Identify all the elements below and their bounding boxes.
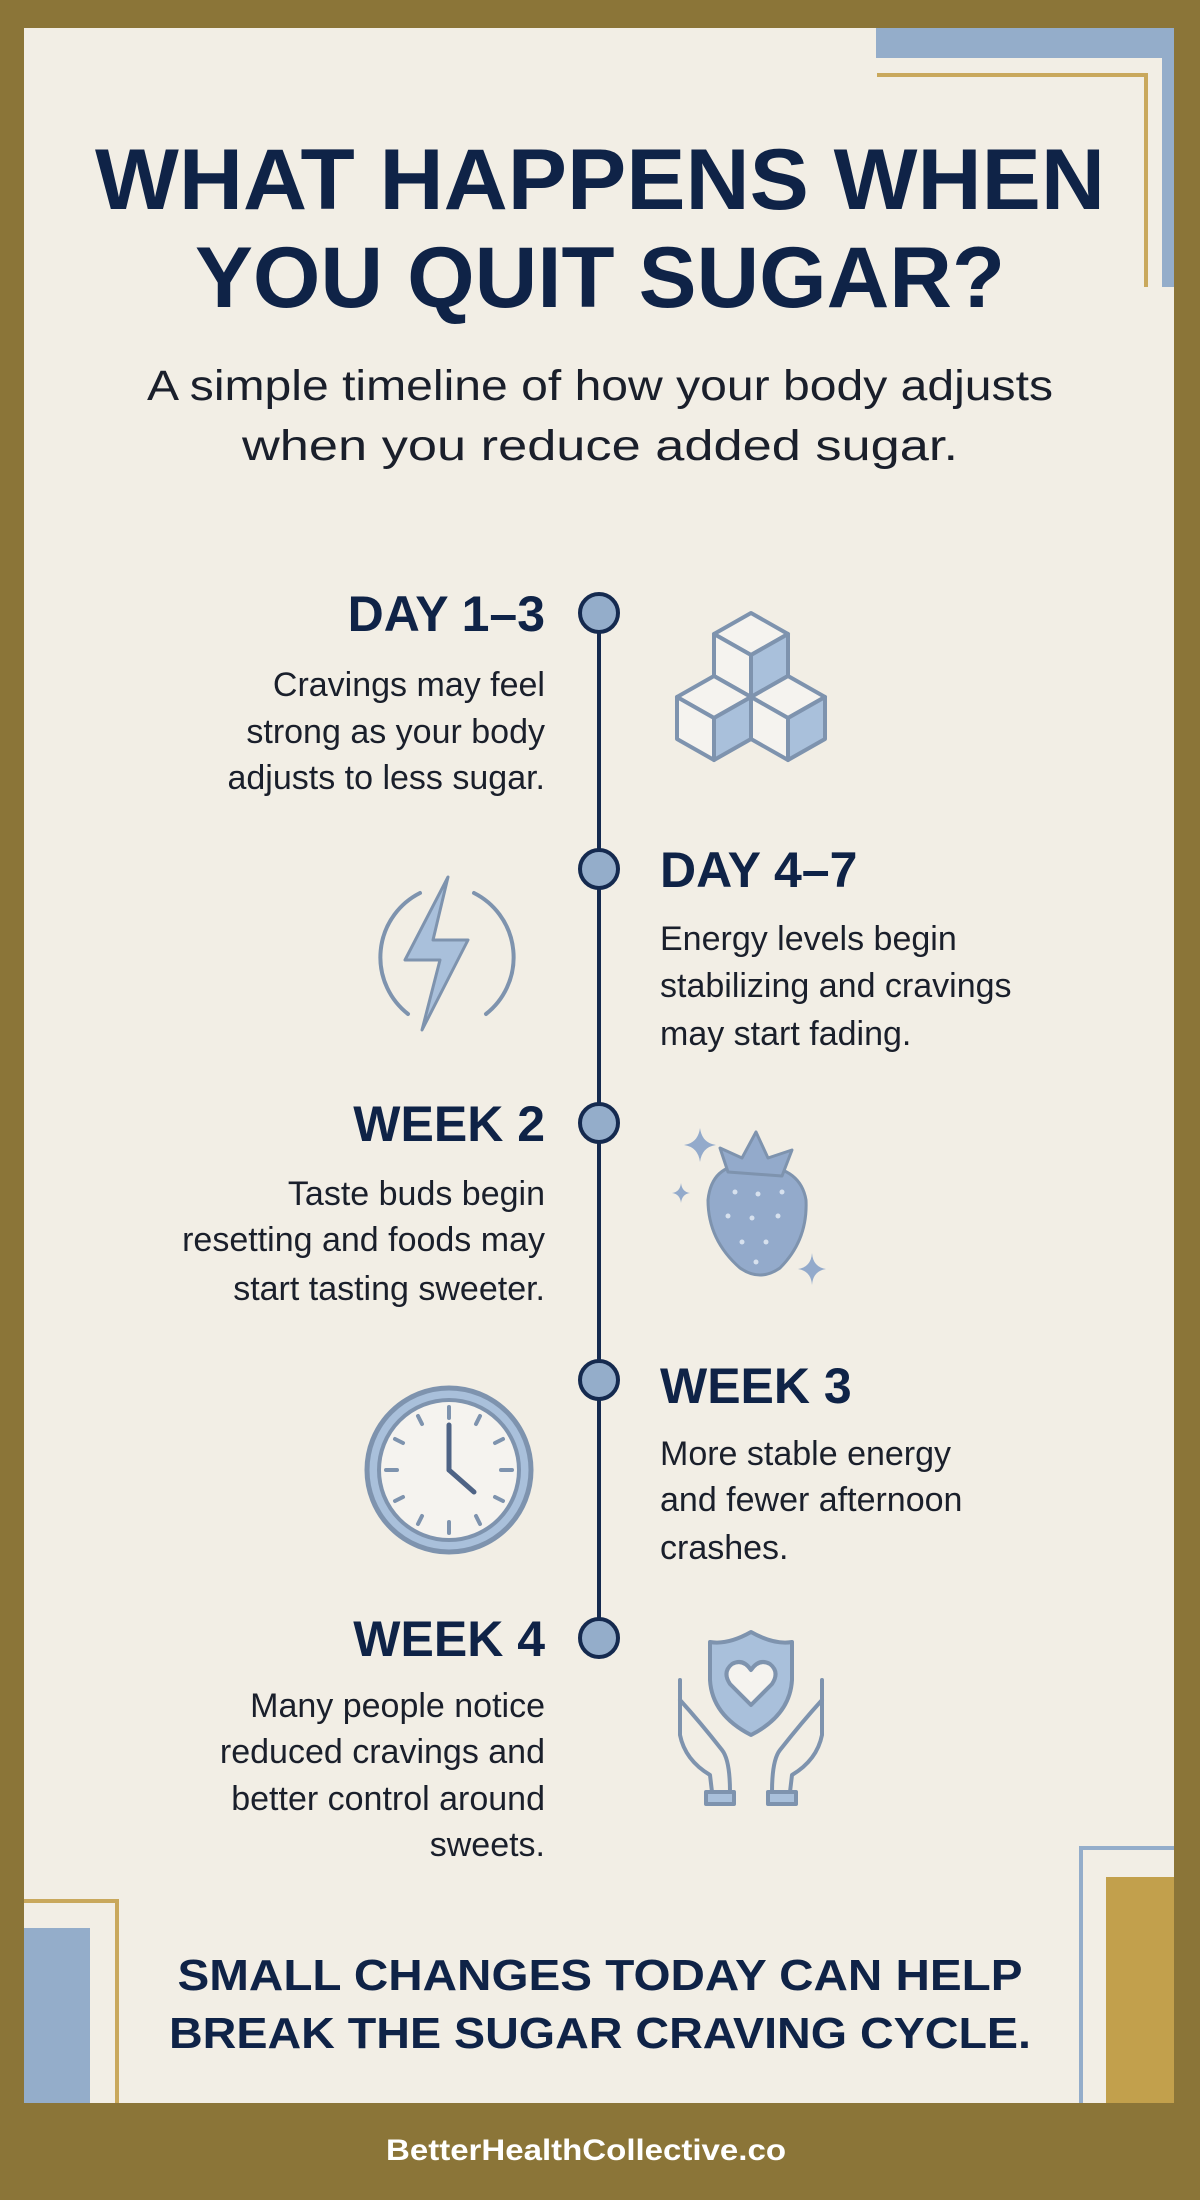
item: Day 1-3 [227,586,545,797]
item: Day 4-7: stabilizing and cravings [660,967,1012,1005]
item: Week 4: WEEK 4 [353,1611,545,1667]
item: Week 4: reduced cravings and [220,1733,545,1771]
item: Week 3: and fewer afternoon [660,1481,962,1519]
title: WHAT HAPPENS WHEN [95,132,1105,228]
closing message: BREAK THE SUGAR CRAVING CYCLE. [169,2009,1031,2058]
item: Day 1-3: DAY 1–3 [348,586,545,642]
item: Week 3: crashes. [660,1529,788,1567]
item: Week 2: resetting and foods may [182,1221,545,1259]
icon: hands with shield heart [680,1632,822,1804]
item: Day 1-3: strong as your body [246,713,545,751]
item: Week 3: More stable energy [660,1435,951,1473]
item: Week 4: sweets. [430,1826,545,1864]
item: Day 1-3: adjusts to less sugar. [227,759,545,797]
timeline line [597,613,601,1638]
item: Day 4-7 [660,842,1012,1053]
decoration: bottom-left corner [24,1899,119,2103]
icon: sugar cubes [677,613,825,760]
item: Week 4: Many people notice [250,1687,545,1725]
item: Day 4-7: DAY 4–7 [660,842,857,898]
subtitle: A simple timeline of how your body adjusts [147,362,1053,410]
timeline dots [580,594,618,1657]
decoration: bottom-right corner [1079,1846,1174,2103]
item: Week 3 [660,1358,962,1567]
icon: strawberry [672,1128,826,1285]
item: Day 4-7: Energy levels begin [660,920,957,958]
subtitle: when you reduce added sugar. [241,422,958,470]
item: Week 2: WEEK 2 [353,1096,545,1152]
title [95,132,1105,326]
item: Day 1-3: Cravings may feel [273,666,545,704]
item: Week 4: better control around [231,1780,545,1818]
item: Week 3: WEEK 3 [660,1358,852,1414]
decoration: top-right corner [876,28,1174,287]
item: Day 4-7: may start fading. [660,1015,911,1053]
icon: lightning [380,877,514,1030]
icon: clock [367,1388,531,1552]
item: Week 4 [220,1611,545,1864]
closing message: SMALL CHANGES TODAY CAN HELP [178,1951,1022,2000]
closing message [169,1951,1031,2058]
item: Week 2: Taste buds begin [288,1175,545,1213]
subtitle [147,362,1053,470]
item: Week 2 [182,1096,545,1308]
footer website: BetterHealthCollective.co [386,2134,786,2167]
title: YOU QUIT SUGAR? [195,230,1005,326]
item: Week 2: start tasting sweeter. [233,1270,545,1308]
